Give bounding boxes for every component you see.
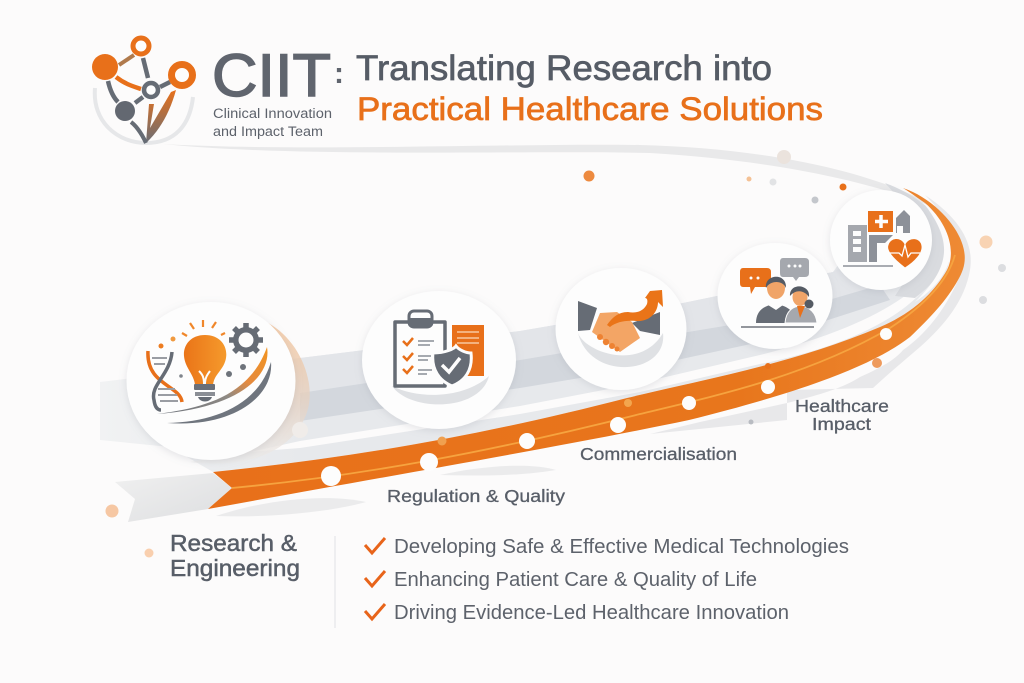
icon: hospital: [843, 210, 910, 266]
label: healthcare impact: [795, 396, 889, 434]
icon: swooshes: [157, 347, 268, 414]
divider: [334, 536, 336, 628]
logo subtitle: Clinical Innovation: [213, 106, 332, 121]
tail of arrow: [115, 473, 232, 522]
ground shadow ellipses: [216, 466, 556, 516]
icon: speech bubbles: [740, 258, 809, 294]
logotype CIIT: CIIT: [212, 42, 331, 109]
checklist: [365, 536, 849, 624]
circle 2: regulation and quality: [362, 291, 516, 429]
icon: handshake: [578, 290, 663, 352]
icon: heart with pulse: [888, 238, 922, 268]
icon: light bulb: [158, 320, 246, 402]
label: research and engineering: [170, 530, 300, 581]
title: Translating Research into: [356, 49, 772, 88]
circle 5: healthcare impact: [830, 190, 932, 290]
logo: [92, 38, 193, 143]
icon: document: [452, 325, 484, 376]
timeline nodes: [321, 328, 892, 486]
label: research and engineering: Engineering: [170, 555, 300, 581]
label: healthcare impact: Healthcare: [795, 396, 889, 416]
checklist: Developing Safe & Effective Medical Technologies: [394, 536, 849, 558]
circle 1: research and engineering: [126, 302, 310, 464]
icon: shield check: [433, 346, 471, 386]
label: research and engineering: Research &: [170, 530, 297, 556]
circle 4: stakeholders: [718, 243, 832, 349]
orange progress band: [208, 188, 965, 509]
checklist: Enhancing Patient Care & Quality of Life: [394, 569, 757, 591]
label: healthcare impact: Impact: [812, 414, 871, 434]
logo subtitle: [213, 106, 332, 139]
grey swoosh below orange band: [650, 195, 971, 434]
icon: two people: [741, 277, 817, 327]
title: [356, 49, 823, 127]
top thin swoosh: [163, 144, 950, 215]
logo subtitle: and Impact Team: [213, 124, 323, 139]
icon: DNA helix: [148, 351, 182, 410]
band centre highlight: [232, 255, 955, 488]
checklist: Driving Evidence-Led Healthcare Innovation: [394, 602, 789, 624]
circle 3: commercialisation: [556, 268, 686, 390]
title: Practical Healthcare Solutions: [357, 91, 823, 127]
decorative dots: [106, 150, 1006, 558]
icon: clipboard: [395, 311, 445, 386]
label: commercialisation: Commercialisation: [580, 444, 737, 464]
icon: gear: [229, 323, 263, 357]
stage labels: [170, 396, 889, 581]
colon: :: [334, 57, 344, 90]
label: regulation: Regulation & Quality: [387, 486, 565, 506]
grey perspective track: [100, 183, 951, 472]
